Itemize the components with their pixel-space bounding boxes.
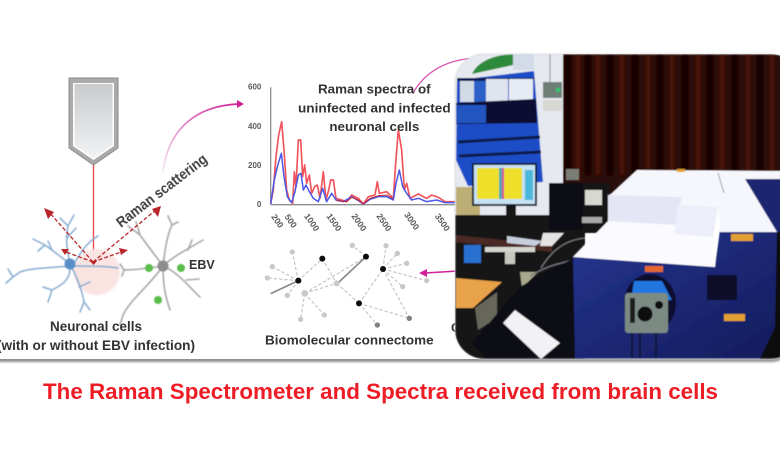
x axis labels: 200 (269, 212, 286, 230)
photo border highlight (455, 54, 780, 359)
series: uninfected red (271, 122, 457, 204)
strong links (271, 257, 366, 294)
partly hidden label: C (451, 320, 461, 335)
icon: Raman probe (69, 78, 118, 165)
arrow: scattering to spectrum (163, 100, 244, 172)
pump device (624, 274, 676, 333)
wall socket (543, 54, 562, 111)
machine base shadow (472, 258, 575, 360)
icon: uninfected neuron (6, 215, 118, 312)
x axis labels: 500 (283, 212, 299, 230)
panel: neuron diagram (0, 78, 215, 353)
y axis labels: 0 (257, 200, 262, 209)
infographic canvas (0, 53, 780, 404)
icon: EBV particles (145, 264, 185, 304)
x axis labels: 1000 (302, 212, 322, 233)
machine upper lid (610, 170, 780, 232)
label: with or without EBV infection: (with or without EBV infection) (0, 338, 195, 353)
scattered rays (49, 209, 157, 262)
wooden table (456, 278, 502, 330)
y axis (269, 87, 273, 205)
x axis labels (269, 210, 452, 233)
label: EBV: EBV (189, 258, 215, 272)
x axis labels: 3000 (402, 210, 422, 232)
cell body: grey soma (158, 260, 168, 272)
chart title: neuronal cells (329, 120, 419, 134)
wall (455, 54, 570, 219)
machine body (573, 230, 777, 359)
white box (608, 195, 682, 225)
machine lower deck (573, 221, 715, 267)
laser beam (92, 165, 94, 262)
x axis labels: 2000 (350, 212, 369, 233)
chart: Raman spectra (248, 83, 457, 233)
light nodes (265, 243, 429, 322)
lid seam (718, 173, 724, 193)
x axis (271, 203, 457, 207)
chart title: uninfected and infected (298, 101, 451, 115)
white tag (503, 310, 560, 359)
y axis labels (248, 83, 262, 209)
x axis labels: 1500 (325, 212, 344, 233)
key nodes (295, 254, 386, 306)
desk and floor (455, 215, 585, 360)
x axis labels: 2500 (375, 212, 394, 233)
chart title (298, 83, 451, 134)
series: overlap dark red (337, 195, 393, 204)
arrow: spectrometer to spectra (413, 58, 475, 93)
partly hidden label: a (463, 337, 471, 352)
partly hidden label (451, 320, 471, 352)
mid nodes (375, 316, 412, 328)
PC tower (549, 169, 610, 233)
curtain (563, 54, 780, 194)
chart title: Raman spectra of (318, 83, 431, 97)
black vent (707, 275, 737, 300)
machine right side (760, 225, 780, 360)
white small box (674, 205, 718, 237)
arrow: photo to connectome (419, 269, 458, 277)
y axis labels: 200 (248, 161, 262, 170)
label: Biomolecular connectome: Biomolecular connectome (265, 332, 434, 347)
cables (530, 238, 585, 276)
cell body: blue soma (64, 258, 76, 270)
label: Raman scattering: Raman scattering (113, 151, 211, 231)
icon: scatter glow (74, 249, 120, 295)
y axis labels: 400 (248, 122, 262, 131)
label: Neuronal cells: Neuronal cells (50, 319, 142, 334)
panel: white rounded card with shadow (0, 54, 780, 362)
green sign (472, 54, 513, 74)
blue lid panel (745, 179, 780, 232)
photo: Raman spectrometer (455, 54, 780, 360)
caption: The Raman Spectrometer and Spectra received from brain cells (43, 379, 718, 404)
series: infected blue (271, 153, 457, 204)
wall poster (456, 71, 543, 186)
diagram: biomolecular connectome (265, 243, 434, 347)
connections (267, 245, 427, 325)
arrowheads (44, 206, 161, 265)
icon: infected neuron (120, 216, 203, 325)
orange labels (645, 169, 753, 321)
y axis labels: 600 (248, 83, 262, 92)
monitor (456, 162, 538, 216)
x axis labels: 3500 (433, 212, 452, 233)
tubes (632, 333, 656, 358)
